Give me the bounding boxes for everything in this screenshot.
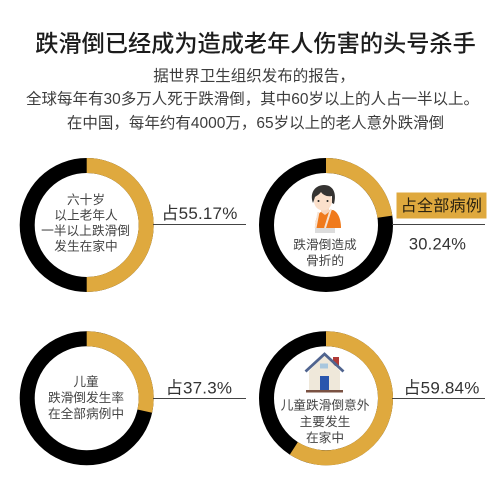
label box: 占全部病例 bbox=[401, 197, 482, 215]
title: 跌滑倒已经成为造成老年人伤害的头号杀手 bbox=[35, 30, 476, 56]
donut label bbox=[41, 193, 130, 254]
leader line bbox=[153, 224, 246, 226]
donut label: 在全部病例中 bbox=[48, 406, 124, 421]
donut label: 骨折的 bbox=[306, 253, 344, 268]
icon: injured man with arm sling bbox=[312, 185, 341, 233]
value: 55.17%: 占55.17% bbox=[161, 204, 238, 223]
value: 30.24%: 30.24% bbox=[409, 236, 466, 254]
panel: seniors falling at home bbox=[27, 166, 246, 284]
donut label: 一半以上跌滑倒 bbox=[41, 223, 130, 238]
label box bbox=[396, 192, 486, 218]
leader line bbox=[153, 398, 246, 400]
leader line bbox=[392, 398, 485, 400]
donut label: 跌滑倒发生率 bbox=[48, 390, 124, 405]
donut label: 发生在家中 bbox=[54, 238, 118, 254]
intro text: 在中国，每年约有4000万，65岁以上的老人意外跌滑倒 bbox=[67, 113, 444, 132]
donut label: 主要发生 bbox=[300, 414, 351, 429]
panel: children fall rate bbox=[27, 339, 246, 458]
donut chart: 55.17% bbox=[27, 166, 146, 284]
donut label bbox=[293, 237, 357, 268]
intro text: 全球每年有30多万人死于跌滑倒，其中60岁以上的人占一半以上。 bbox=[26, 90, 479, 108]
intro text bbox=[26, 67, 479, 132]
donut chart: 37.3% bbox=[27, 339, 146, 458]
donut label: 六十岁 bbox=[67, 193, 105, 207]
donut label: 跌滑倒造成 bbox=[293, 237, 357, 252]
donut label: 儿童 bbox=[73, 374, 99, 389]
panel: falls causing fractures bbox=[266, 166, 486, 284]
donut label bbox=[48, 374, 124, 421]
donut chart: 30.24% bbox=[266, 166, 386, 284]
donut label: 儿童跌滑倒意外 bbox=[281, 398, 370, 412]
donut label: 以上老年人 bbox=[54, 208, 118, 222]
donut chart: 59.84% bbox=[266, 339, 386, 458]
value: 59.84%: 占59.84% bbox=[403, 378, 480, 398]
intro text: 据世界卫生组织发布的报告， bbox=[153, 67, 355, 85]
value: 37.3%: 占37.3% bbox=[166, 378, 232, 398]
donut label bbox=[281, 398, 370, 445]
panel: children falling at home bbox=[266, 339, 485, 458]
leader line bbox=[392, 224, 485, 226]
donut label: 在家中 bbox=[306, 430, 344, 445]
icon: house bbox=[306, 354, 344, 392]
